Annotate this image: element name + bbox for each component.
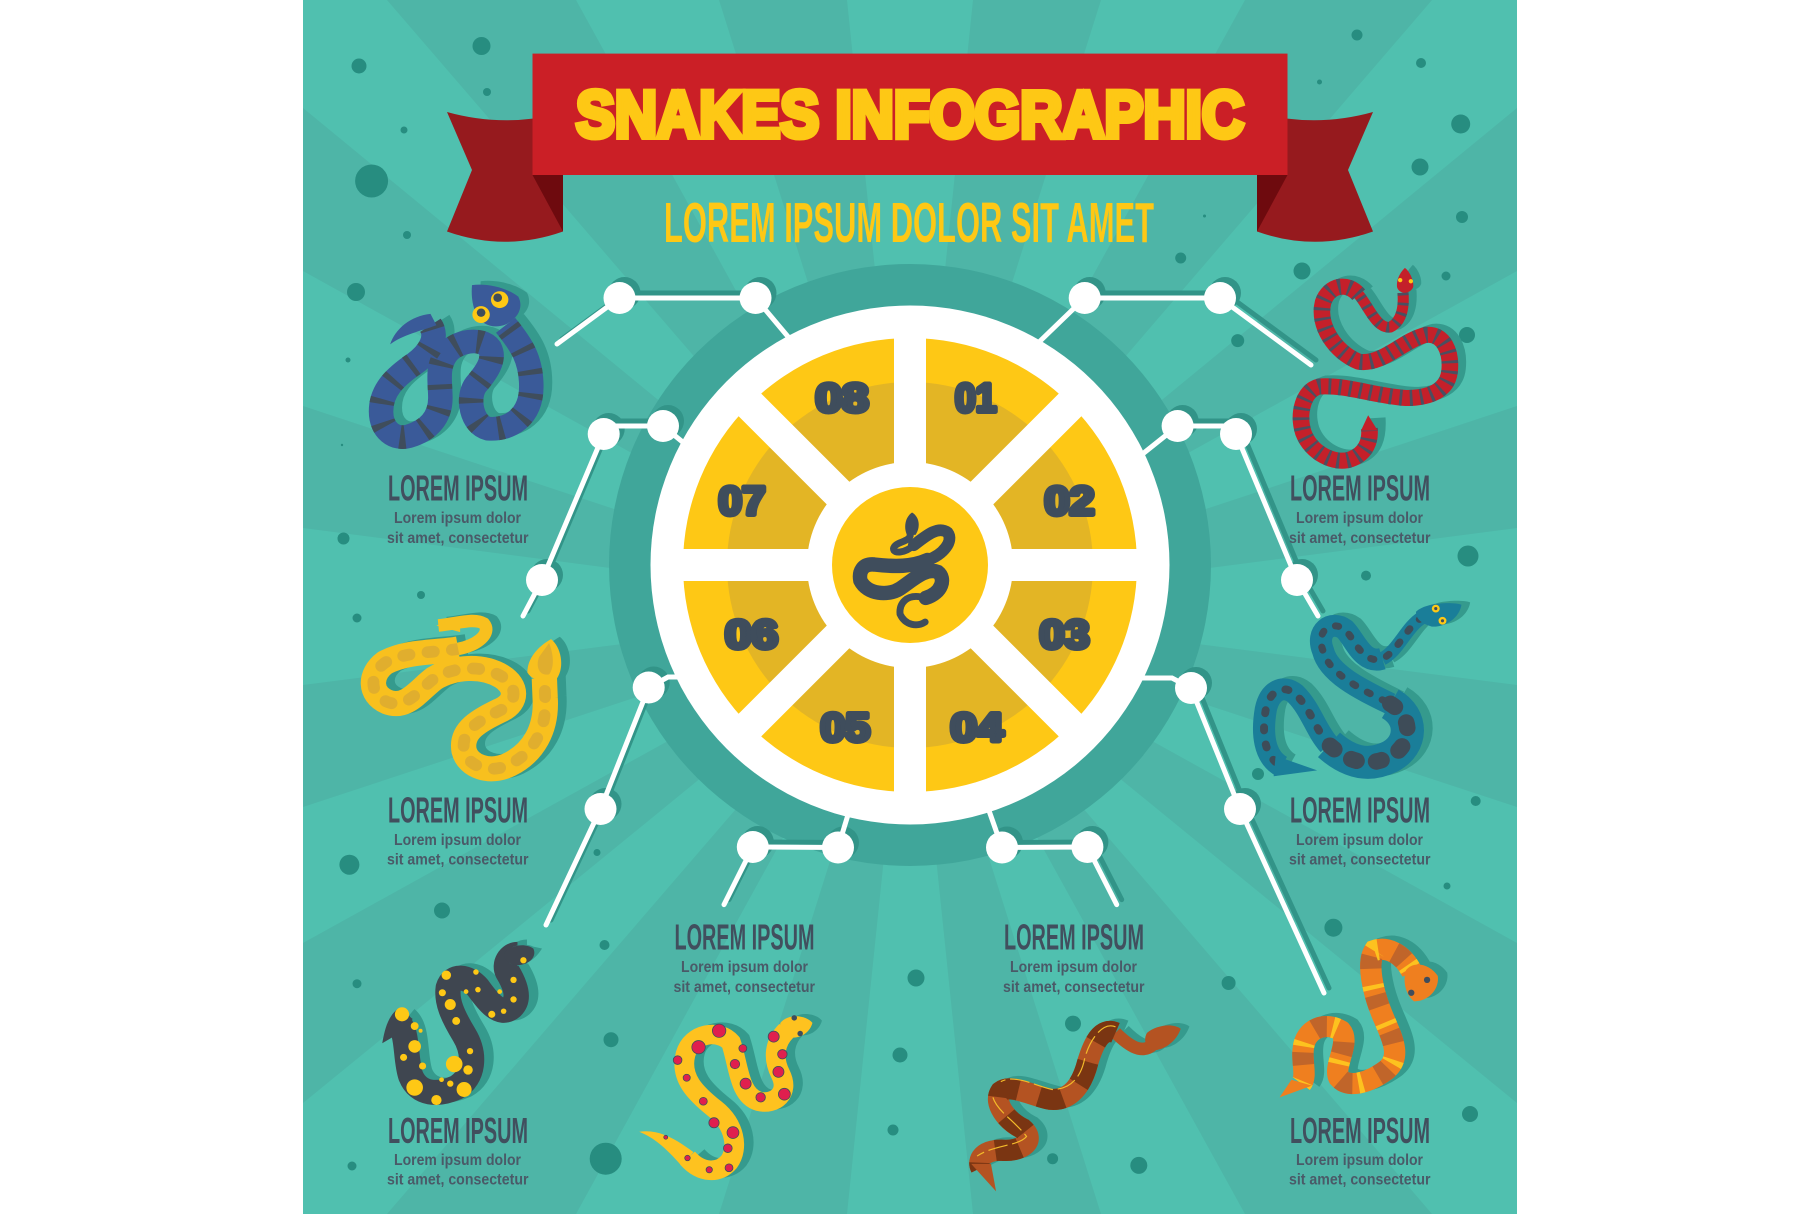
number 05: 05	[820, 706, 870, 750]
number 03: 03	[1040, 613, 1090, 657]
label 3: Lorem ipsum dolor	[394, 832, 521, 849]
number 01: 01	[955, 376, 996, 420]
icon: central snake	[860, 512, 949, 625]
label 6: Lorem ipsum dolor	[681, 959, 808, 976]
connector top left	[557, 282, 795, 345]
label 7: sit amet, consectetur	[1003, 979, 1144, 996]
label 3	[387, 790, 528, 868]
label 5: sit amet, consectetur	[387, 1172, 528, 1188]
label 4	[1289, 790, 1430, 868]
snake 7: brown	[971, 1023, 1189, 1191]
background panel with sunburst rays	[303, 0, 1517, 1214]
snake 8: orange banded	[1280, 946, 1447, 1097]
snake 4: teal blue	[1264, 601, 1470, 776]
label 3: sit amet, consectetur	[387, 852, 528, 868]
label 7: LOREM IPSUM	[1004, 917, 1144, 958]
ribbon banner	[447, 54, 1373, 242]
label 2	[1289, 468, 1430, 547]
label 6	[674, 917, 815, 996]
title: SNAKES INFOGRAPHIC	[576, 77, 1244, 151]
connector bottom right	[986, 805, 1117, 905]
connector middle right lower	[1130, 672, 1324, 993]
label 8	[1289, 1110, 1430, 1188]
snake 2: red coral	[1301, 265, 1458, 461]
snake 1: blue banded	[381, 281, 540, 437]
label 4: Lorem ipsum dolor	[1296, 832, 1423, 849]
connector lines	[523, 277, 1329, 993]
connector middle left upper	[523, 410, 690, 616]
label 4: LOREM IPSUM	[1290, 790, 1430, 830]
number 02: 02	[1044, 480, 1094, 524]
label 7	[1003, 917, 1144, 996]
connector top right	[1036, 282, 1311, 365]
snake 3: yellow python	[373, 616, 570, 769]
label 1: LOREM IPSUM	[388, 468, 528, 509]
banner bar	[532, 54, 1288, 175]
label 1: Lorem ipsum dolor	[394, 510, 521, 527]
label 8: Lorem ipsum dolor	[1296, 1152, 1423, 1169]
ribbon tail right	[1257, 112, 1373, 242]
number 06: 06	[725, 613, 778, 657]
label 6: LOREM IPSUM	[674, 917, 814, 958]
label 1	[387, 468, 528, 547]
connector middle left lower	[546, 672, 690, 925]
connector bottom left	[724, 805, 854, 905]
connector shadows	[528, 277, 1329, 988]
label 2: Lorem ipsum dolor	[1296, 510, 1423, 527]
label 1: sit amet, consectetur	[387, 530, 528, 547]
connector middle right upper	[1135, 410, 1318, 616]
label 2: LOREM IPSUM	[1290, 468, 1430, 509]
ribbon tail left	[447, 112, 563, 242]
label 6: sit amet, consectetur	[674, 979, 815, 996]
label 8: LOREM IPSUM	[1290, 1110, 1430, 1151]
snake 5: dark with yellow spots	[382, 945, 542, 1105]
number 07: 07	[718, 480, 766, 524]
label 2: sit amet, consectetur	[1289, 530, 1430, 547]
outer ring	[609, 264, 1211, 866]
label 5: Lorem ipsum dolor	[394, 1152, 521, 1169]
label 4: sit amet, consectetur	[1289, 852, 1430, 868]
label 8: sit amet, consectetur	[1289, 1172, 1430, 1188]
central wheel	[650, 306, 1170, 824]
subtitle: LOREM IPSUM DOLOR SIT AMET	[664, 191, 1154, 255]
decorative dots	[338, 30, 1481, 1175]
label 7: Lorem ipsum dolor	[1010, 959, 1137, 976]
number 08: 08	[816, 376, 868, 420]
number 04: 04	[950, 706, 1004, 750]
label 5: LOREM IPSUM	[388, 1110, 528, 1151]
label 3: LOREM IPSUM	[388, 790, 528, 830]
snake 6: yellow with red spots	[639, 1014, 822, 1173]
label 5	[387, 1110, 528, 1188]
